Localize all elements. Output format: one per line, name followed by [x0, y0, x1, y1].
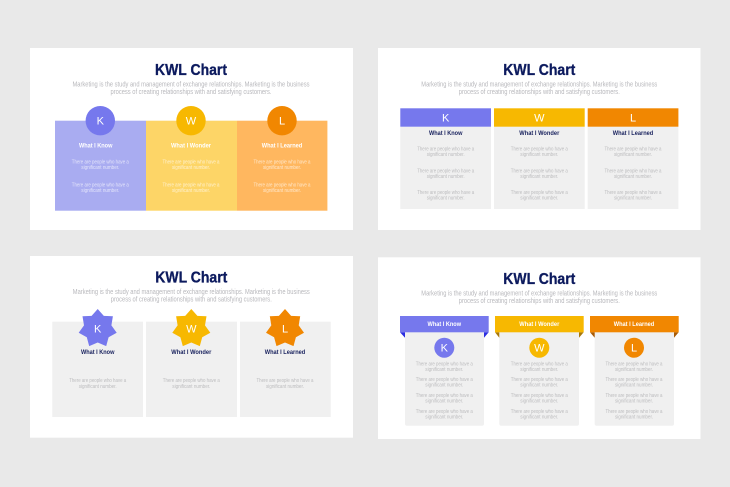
column: What I Learned [237, 106, 327, 211]
column: What I Wonder: What I Wonder [171, 142, 211, 149]
column: What I Wonder: There are people who have a [511, 190, 568, 196]
column: What I Wonder [146, 106, 237, 211]
column: What I Learned: significant number. [614, 152, 652, 158]
column: What I Know: K [94, 324, 102, 336]
column: What I Know: K [441, 343, 449, 355]
column: What I Learned: There are people who have a [606, 377, 663, 383]
column: What I Learned: There are people who have a [254, 183, 311, 189]
column: What I Know: significant number. [425, 399, 463, 405]
column: What I Wonder: W [534, 343, 545, 355]
title: KWL Chart [503, 271, 575, 288]
column: What I Know: K [97, 116, 105, 128]
column: What I Wonder: significant number. [520, 367, 558, 373]
column: What I Wonder: There are people who have a [162, 183, 220, 189]
panel: header bars variant [378, 48, 700, 230]
column: What I Wonder: There are people who have a [511, 377, 568, 383]
column: What I Wonder: What I Wonder [519, 321, 560, 328]
column: What I Know: There are people who have a [416, 409, 473, 415]
column: What I Learned: L [282, 324, 288, 336]
column: What I Learned [240, 309, 331, 417]
column: What I Know: significant number. [425, 367, 463, 373]
subtitle: process of creating relationships with and satisfying customers. [459, 87, 620, 96]
column: What I Learned: significant number. [615, 414, 653, 420]
column: What I Know: significant number. [81, 165, 119, 171]
column: What I Wonder [495, 316, 584, 426]
column: What I Know: significant number. [425, 414, 463, 420]
title: KWL Chart [503, 62, 575, 79]
column: What I Wonder [494, 108, 585, 209]
column: What I Wonder: There are people who have a [511, 409, 568, 415]
column: What I Learned: significant number. [614, 196, 652, 202]
panel: circle badges variant [30, 48, 353, 230]
subtitle [72, 79, 310, 96]
column: What I Know: There are people who have a [72, 183, 129, 189]
column: What I Wonder [146, 309, 237, 417]
column: What I Wonder: significant number. [172, 165, 210, 171]
column: What I Know: There are people who have a [416, 362, 473, 368]
column: What I Learned [590, 316, 679, 426]
column: What I Know: What I Know [79, 142, 113, 149]
column: What I Learned [588, 108, 678, 209]
column: What I Learned: L [631, 343, 637, 355]
column: What I Learned: There are people who have a [604, 168, 662, 174]
subtitle: Marketing is the study and management of exchange relationships. Marketing is the business [72, 79, 310, 88]
subtitle [421, 79, 658, 96]
column: What I Wonder: There are people who have a [511, 168, 568, 174]
column: What I Know [52, 309, 143, 417]
column: What I Learned: What I Learned [265, 349, 305, 356]
title: KWL Chart [155, 270, 227, 286]
subtitle: process of creating relationships with and satisfying customers. [459, 296, 620, 305]
column: What I Know: What I Know [429, 130, 463, 137]
column: What I Wonder: There are people who have a [511, 146, 568, 152]
column: What I Learned: There are people who have a [254, 160, 311, 166]
column: What I Learned: There are people who have a [604, 146, 662, 152]
column: What I Know [400, 316, 489, 426]
column: What I Learned: What I Learned [262, 142, 302, 149]
column: What I Learned: significant number. [615, 382, 653, 388]
column: What I Know: There are people who have a [417, 146, 474, 152]
column: What I Know: What I Know [81, 349, 115, 356]
column: What I Wonder: W [534, 112, 545, 124]
column: What I Learned: There are people who have a [256, 378, 314, 384]
column: What I Know: What I Know [428, 321, 462, 328]
column: What I Wonder: significant number. [520, 414, 558, 420]
column: What I Know: significant number. [81, 188, 119, 194]
column: What I Wonder: significant number. [172, 188, 210, 194]
column: What I Learned: There are people who have a [606, 409, 663, 415]
subtitle: process of creating relationships with and satisfying customers. [110, 87, 272, 96]
subtitle: Marketing is the study and management of exchange relationships. Marketing is the business [421, 79, 658, 88]
panel: star badges variant [30, 256, 353, 438]
column: What I Learned: What I Learned [613, 130, 653, 137]
column: What I Know: There are people who have a [69, 378, 126, 384]
column: What I Wonder: significant number. [520, 382, 558, 388]
column: What I Learned: What I Learned [614, 321, 654, 328]
column: What I Wonder: significant number. [520, 196, 558, 202]
column: What I Learned: significant number. [266, 384, 304, 390]
column: What I Learned: significant number. [614, 174, 652, 180]
column: What I Learned: significant number. [615, 399, 653, 405]
column: What I Know: There are people who have a [417, 190, 474, 196]
subtitle: Marketing is the study and management of exchange relationships. Marketing is the business [73, 287, 310, 296]
column: What I Wonder: There are people who have a [511, 362, 568, 368]
column: What I Wonder: W [186, 324, 197, 336]
column: What I Know: There are people who have a [416, 393, 473, 399]
column: What I Wonder: significant number. [520, 399, 558, 405]
column: What I Learned: There are people who have a [604, 190, 662, 196]
column: What I Wonder: significant number. [172, 384, 210, 390]
subtitle [421, 289, 658, 305]
column: What I Wonder: There are people who have a [163, 378, 220, 384]
column: What I Know: significant number. [427, 174, 465, 180]
column: What I Know: There are people who have a [72, 160, 129, 166]
column: What I Know: K [442, 112, 450, 124]
column: What I Learned: L [630, 112, 636, 124]
column: What I Learned: significant number. [263, 188, 301, 194]
panel: ribbon headers variant [378, 257, 700, 439]
column: What I Learned: There are people who have a [606, 362, 663, 368]
column: What I Know: There are people who have a [416, 377, 473, 383]
title: KWL Chart [155, 62, 227, 79]
column: What I Know: significant number. [427, 152, 465, 158]
column: What I Know: significant number. [79, 384, 117, 390]
column: What I Know [55, 106, 146, 211]
column: What I Wonder: There are people who have a [511, 393, 568, 399]
column: What I Wonder: significant number. [520, 152, 558, 158]
column: What I Know: significant number. [427, 196, 465, 202]
column: What I Learned: significant number. [615, 367, 653, 373]
column: What I Wonder: There are people who have a [162, 160, 220, 166]
column: What I Learned: significant number. [263, 165, 301, 171]
column: What I Know: significant number. [425, 382, 463, 388]
column: What I Know [400, 108, 491, 209]
column: What I Learned: There are people who have a [606, 393, 663, 399]
subtitle: Marketing is the study and management of exchange relationships. Marketing is the business [421, 289, 658, 298]
column: What I Learned: L [279, 116, 285, 128]
column: What I Know: There are people who have a [417, 168, 474, 174]
subtitle: process of creating relationships with and satisfying customers. [111, 294, 272, 304]
column: What I Wonder: What I Wonder [171, 349, 212, 356]
column: What I Wonder: significant number. [520, 174, 558, 180]
column: What I Wonder: What I Wonder [519, 130, 560, 137]
column: What I Wonder: W [186, 116, 197, 128]
subtitle [73, 287, 310, 304]
